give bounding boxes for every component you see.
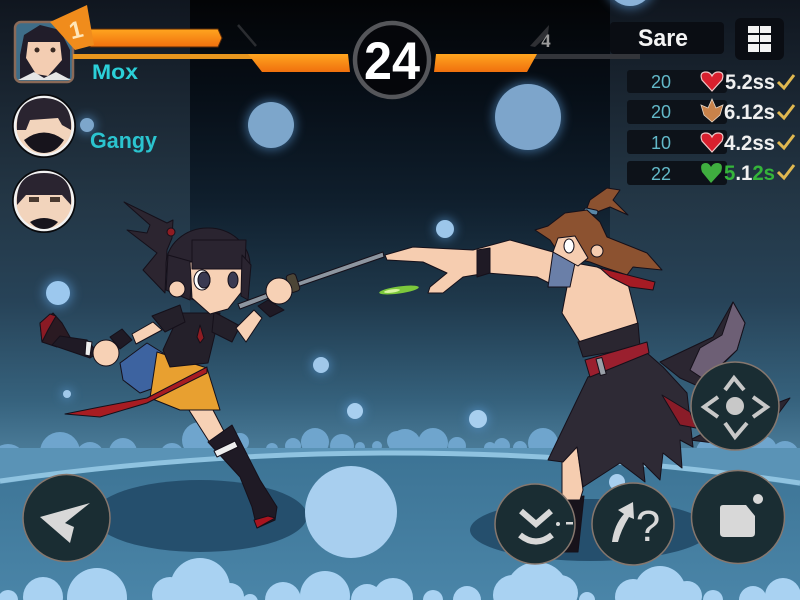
HUD: score row 2: 20 <box>651 102 671 122</box>
HUD: score row 3 <box>627 130 794 155</box>
girl red sash <box>65 367 207 417</box>
icon: paper plane arrow <box>40 503 90 543</box>
fighter head <box>535 210 662 275</box>
girl left wristband <box>110 329 132 349</box>
HUD: rank badge <box>50 5 94 50</box>
icon: directional arrows <box>704 378 767 437</box>
girl tie <box>197 325 204 343</box>
girl right wristband <box>258 300 284 317</box>
HUD: player portrait Mox <box>15 22 73 82</box>
fighter arm and hand <box>385 240 557 293</box>
HUD: grid menu button <box>735 18 784 60</box>
HUD: score row 3: 10 <box>651 133 671 153</box>
HUD: score row 2 <box>627 99 794 124</box>
HUD: opponent score: 4 <box>541 31 551 52</box>
HUD: score row 4: 5.12s <box>724 162 775 185</box>
icon: check <box>778 105 794 118</box>
icon: notched square and dot <box>720 494 763 537</box>
HUD: avatar Gangy <box>12 94 76 158</box>
button: directional pad <box>691 362 779 450</box>
button: double chevron down <box>495 484 575 564</box>
HUD: score row 3: 4.2ss <box>724 132 775 155</box>
HUD: score row 1: 20 <box>651 72 671 92</box>
icon: chevrons <box>520 511 552 542</box>
girl right arm <box>236 310 262 342</box>
button: back arrow <box>23 474 110 562</box>
HUD: top health bar <box>90 29 222 47</box>
girl sleeve left <box>152 305 185 332</box>
fighter leg <box>562 447 583 500</box>
HUD: left timer bar <box>73 54 350 72</box>
large orb <box>305 466 397 558</box>
icon: check <box>778 75 794 88</box>
fighter torso <box>562 263 638 342</box>
girl front leg and boot <box>187 407 277 528</box>
HUD: score row 4: 22 <box>651 164 671 184</box>
girl blue skirt <box>120 343 163 393</box>
HUD: opponent name panel: Sare <box>638 25 688 52</box>
HUD: score row 1: 5.2ss <box>725 71 775 94</box>
girl sleeve right <box>212 312 240 342</box>
girl hair tail <box>124 202 173 293</box>
fighter black top <box>578 323 640 357</box>
HUD: opponent score <box>530 25 551 52</box>
girl fighter with sword <box>40 202 384 528</box>
girl right hand <box>266 278 292 304</box>
floor <box>0 448 800 600</box>
HUD: opponent name panel <box>610 22 724 54</box>
icon: question mark: ? <box>636 502 660 551</box>
glowing orbs <box>43 0 656 430</box>
icon: check <box>778 135 794 148</box>
green projectile <box>379 284 419 296</box>
girl hair bead <box>167 228 175 236</box>
fighter armband <box>548 252 575 287</box>
button: jump question <box>592 483 674 565</box>
fighter boot <box>518 496 584 552</box>
icon: up arrow <box>612 502 634 542</box>
icon: dot and dash <box>556 522 573 526</box>
sword <box>238 252 384 309</box>
back clouds <box>0 422 799 480</box>
small floor orb <box>609 474 625 490</box>
HUD: score row 2: 6.12s <box>724 101 775 124</box>
fighter hair band <box>584 208 598 215</box>
floor shadows <box>93 480 710 561</box>
girl torso <box>163 313 220 367</box>
HUD: score row 4 <box>627 161 794 185</box>
fighter skirt <box>548 353 693 487</box>
icon: check <box>778 165 794 178</box>
fighter cape <box>660 302 790 445</box>
HUD: score row 1 <box>627 70 794 94</box>
fighter skirt red trim <box>662 395 696 428</box>
HUD: avatar third player <box>12 169 76 233</box>
girl left arm <box>132 322 162 344</box>
fighter wristband <box>477 248 490 277</box>
button: square skill <box>692 470 784 564</box>
girl left hand <box>93 340 119 366</box>
icon: bird emblem <box>701 99 723 122</box>
girl orange skirt <box>150 352 220 410</box>
icon: red heart <box>701 72 723 91</box>
HUD: divider slash left <box>238 25 256 46</box>
male fighter <box>385 188 790 552</box>
girl back leg and shoe <box>40 313 98 358</box>
icon: green heart <box>701 163 722 183</box>
fighter red belt <box>585 342 649 377</box>
rank number: 1 <box>66 16 86 45</box>
HUD: right timer bar <box>434 54 640 72</box>
icon: red heart <box>701 133 723 152</box>
HUD: timer <box>355 23 429 97</box>
fighter red scarf <box>600 268 655 290</box>
HUD: player name Mox: Mox <box>92 61 138 84</box>
HUD: player name Gangy: Gangy <box>90 128 158 153</box>
girl head <box>166 228 251 314</box>
front clouds <box>0 558 800 600</box>
HUD: timer: 24 <box>364 32 420 91</box>
fighter ponytail <box>587 188 628 215</box>
